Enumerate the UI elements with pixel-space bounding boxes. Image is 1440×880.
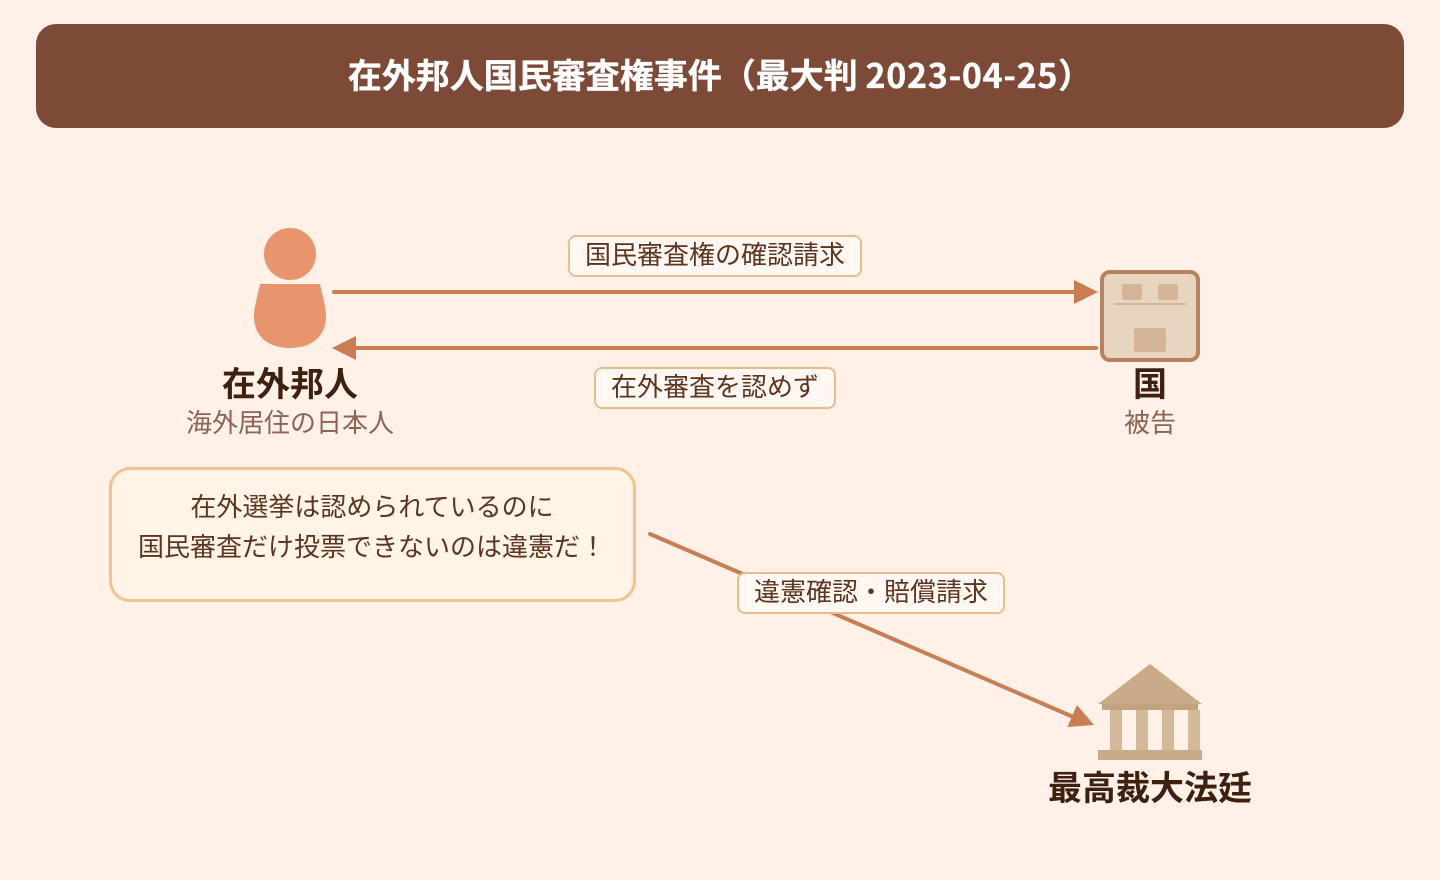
callout: speech: 在外選挙は認められているのに [190,486,554,524]
title banner [36,24,1404,128]
callout: speech [108,466,636,602]
icon: supreme court [1098,664,1202,760]
label: state name: 国 [1133,357,1167,406]
arrow: claim to supreme court [650,534,1094,727]
arrow: state to person [332,336,1096,360]
icon: government building [1102,272,1198,360]
label: confirmation claim: 国民審査権の確認請求 [585,235,845,272]
label: state description: 被告 [1124,403,1176,440]
label: plaintiff name: 在外邦人 [222,357,358,406]
label: overseas review denied: 在外審査を認めず [611,367,819,404]
arrow: person to state [334,280,1098,304]
callout: speech: 国民審査だけ投票できないのは違憲だ！ [138,526,606,564]
label: supreme court: 最高裁大法廷 [1048,761,1252,810]
label: unconstitutionality claim: 違憲確認・賠償請求 [754,572,988,609]
label: plaintiff description: 海外居住の日本人 [186,403,394,440]
icon: person [254,228,326,348]
title banner: 在外邦人国民審査権事件（最大判 2023-04-25） [348,49,1092,98]
